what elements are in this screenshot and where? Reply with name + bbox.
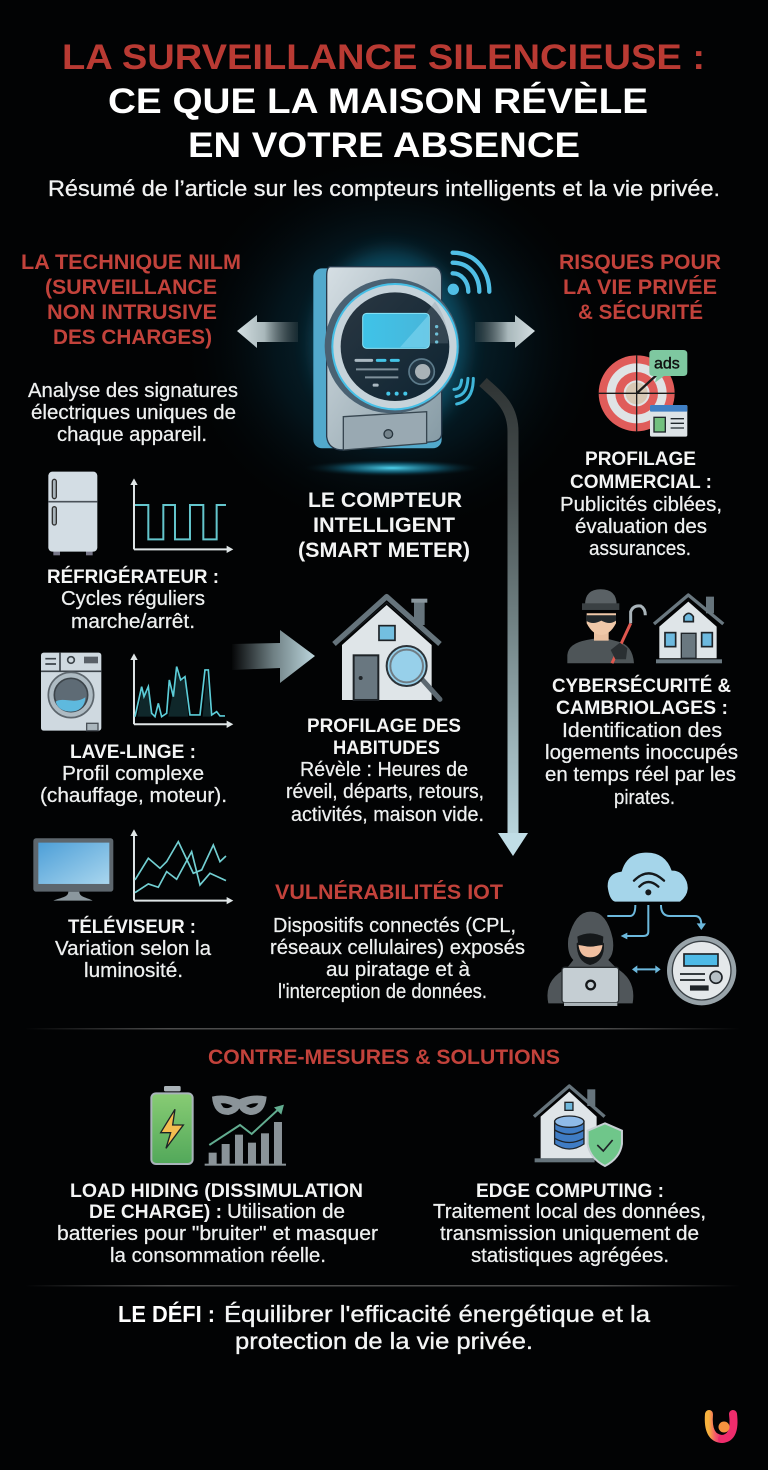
icon: logo [709,1414,734,1439]
title [62,38,705,165]
divider [25,1028,740,1030]
glow: meter base [300,459,484,477]
heading: NILM [21,251,241,349]
icon: house with magnifier [334,597,440,700]
text: NILM description: électriques uniques de [31,402,236,424]
title: CE QUE LA MAISON RÉVÈLE [108,81,648,121]
text: cybersecurity: CAMBRIOLAGES : [556,697,728,719]
conclusion: Équilibrer l'efficacité énergétique et la [224,1301,650,1327]
conclusion: protection de la vie privée. [235,1328,533,1354]
text: habits profiling [286,715,484,826]
label: smart meter: INTELLIGENT [313,514,455,537]
label: television: Variation selon la [55,938,212,960]
text: edge computing: statistiques agrégées. [471,1245,669,1267]
text: habits profiling: HABITUDES [333,737,440,759]
icon: burglar and house [567,589,723,663]
text: NILM description: chaque appareil. [57,424,207,446]
label: television [55,915,212,982]
label: smart meter: LE COMPTEUR [308,489,462,512]
heading: risks: RISQUES POUR [559,251,721,274]
text: commercial profiling [560,448,722,560]
divider [25,1285,740,1286]
label: refrigerator: Cycles réguliers [61,588,205,610]
text: commercial profiling: assurances. [589,538,691,560]
text: commercial profiling: évaluation des [575,516,707,538]
text: edge computing [433,1180,706,1267]
subtitle: Résumé de l’article sur les compteurs intelligents et la vie privée. [48,176,720,201]
icon: ad target [598,350,687,437]
icon: battery, mask and rising chart [151,1086,622,1166]
text: habits profiling: Révèle : Heures de [300,759,468,781]
icon: ad target: ads [654,356,680,373]
text: IoT description: l'interception de données. [278,981,487,1003]
label: refrigerator: RÉFRIGÉRATEUR : [47,565,219,588]
panel: IoT vulnerabilities [270,853,736,1006]
title: EN VOTRE ABSENCE [188,126,580,165]
arrow: to NILM [237,315,298,348]
arrow: to habits [232,630,315,683]
chart: washing machine load [130,653,233,728]
panel: risks [545,251,738,809]
text: IoT description [270,915,525,1003]
text: cybersecurity: Identification des [562,720,722,742]
heading: NILM: DES CHARGES) [53,326,212,349]
icon: smart meter [313,250,467,450]
heading: IoT: VULNÉRABILITÉS IOT [275,881,503,904]
heading: risks [559,251,721,324]
text: edge computing: transmission uniquement de [440,1223,699,1245]
heading: risks: LA VIE PRIVÉE [563,276,717,299]
text: edge computing: Traitement local des données, [433,1201,706,1223]
heading: NILM: NON INTRUSIVE [47,301,217,324]
heading: NILM: (SURVEILLANCE [45,276,217,299]
label: television: luminosité. [84,960,183,982]
chart: refrigerator square wave [130,478,233,553]
label: smart meter [298,489,470,562]
text: habits profiling: PROFILAGE DES [307,715,461,737]
label: washing machine: LAVE-LINGE : [70,741,196,763]
text: cybersecurity: CYBERSÉCURITÉ & [552,674,731,697]
chart: television load [130,829,233,904]
heading: countermeasures: CONTRE-MESURES & SOLUTIONS [208,1046,560,1069]
label: smart meter: (SMART METER) [298,539,470,562]
text: IoT description: au piratage et à [326,959,471,981]
heading: NILM: LA TECHNIQUE NILM [21,251,241,274]
text: cybersecurity: en temps réel par les [545,764,736,786]
title: LA SURVEILLANCE SILENCIEUSE : [62,38,705,77]
label: refrigerator [47,565,219,633]
text: NILM description: Analyse des signatures [28,380,238,402]
label: television: TÉLÉVISEUR : [68,915,196,938]
heading: risks: & SÉCURITÉ [578,301,703,324]
text: load hiding: DE CHARGE) : [89,1201,222,1223]
text: commercial profiling: COMMERCIAL : [570,471,712,493]
text: load hiding: Utilisation de [227,1201,345,1223]
arrow: down to IoT [483,382,528,856]
text: cybersecurity: pirates. [614,787,675,809]
text: commercial profiling: Publicités ciblées, [560,494,722,516]
text: edge computing: EDGE COMPUTING : [476,1180,664,1202]
label: washing machine: Profil complexe [62,763,204,785]
icon: washing machine [41,653,101,731]
label: washing machine: (chauffage, moteur). [40,785,227,807]
text: habits profiling: activités, maison vide. [291,804,484,826]
text: load hiding: LOAD HIDING (DISSIMULATION [70,1180,363,1202]
text: commercial profiling: PROFILAGE [585,448,696,470]
text: IoT description: Dispositifs connectés (CPL, [273,915,516,937]
text: NILM description [28,380,238,446]
arrow: to risks [475,315,535,348]
text: load hiding: la consommation réelle. [110,1245,326,1267]
text: load hiding [57,1180,378,1267]
icon: hacker, cloud and meter [547,853,736,1006]
text: cybersecurity [545,674,738,809]
conclusion [118,1300,650,1354]
icon: refrigerator [48,472,97,555]
label: washing machine [40,741,227,807]
icon: wifi signal [448,253,489,404]
label: refrigerator: marche/arrêt. [71,611,195,633]
text: habits profiling: réveil, départs, retours, [286,781,484,803]
text: IoT description: réseaux cellulaires) exposés [270,937,525,959]
panel: countermeasures [57,1046,706,1267]
icon: television [33,838,113,901]
text: load hiding: batteries pour "bruiter" et masquer [57,1223,378,1245]
panel: la technique NILM [21,251,241,982]
text: cybersecurity: logements inoccupés [545,742,738,764]
conclusion: LE DÉFI : [118,1300,215,1327]
